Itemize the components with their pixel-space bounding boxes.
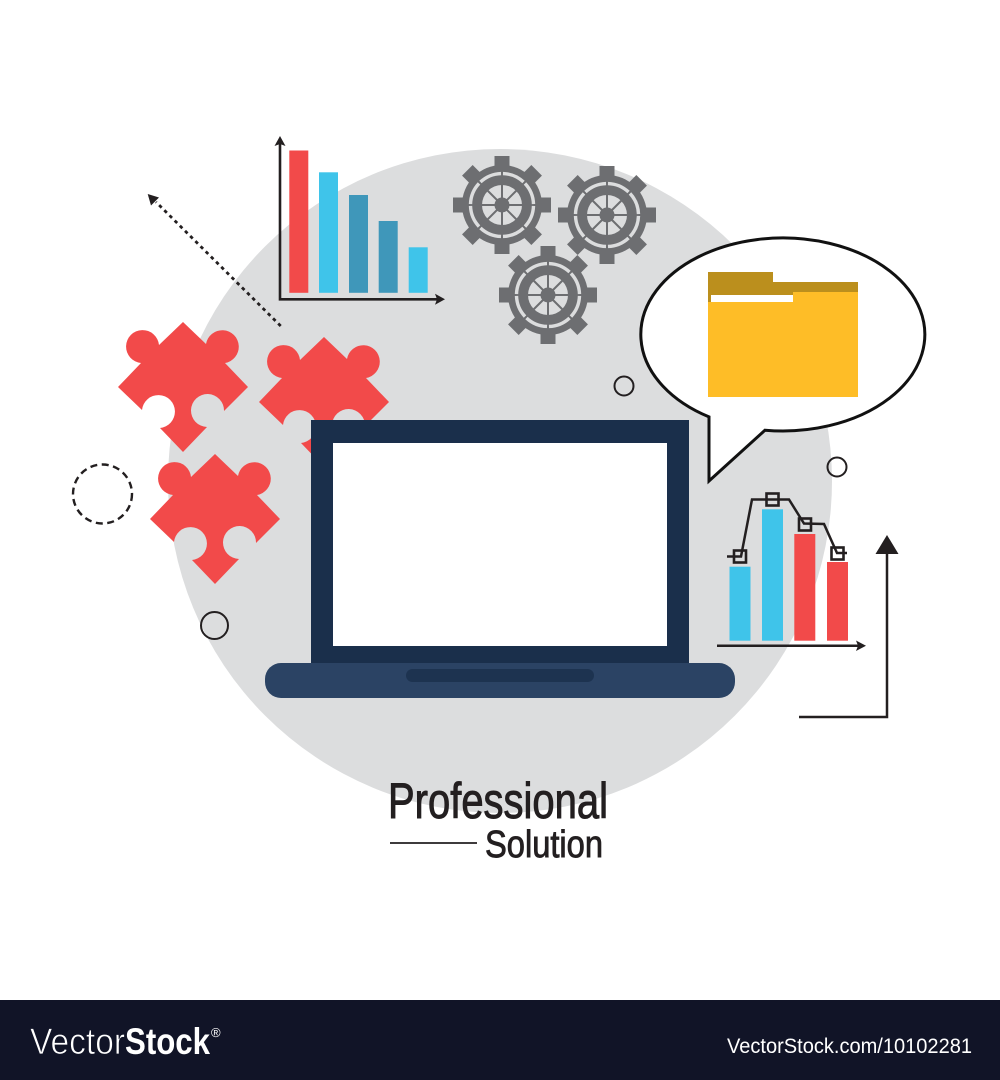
bar: teal (349, 195, 368, 293)
trend markers (734, 494, 844, 562)
dotted arrow (148, 194, 281, 326)
bar chart: line overlay (717, 494, 866, 651)
laptop screen frame (311, 420, 689, 663)
puzzle piece: top right (259, 337, 389, 467)
speech bubble (641, 238, 925, 481)
subtitle rule (390, 842, 477, 844)
bar: light blue short (409, 247, 428, 293)
bar: red (289, 150, 308, 293)
background grey circle (168, 149, 832, 813)
title: Solution: Solution (485, 824, 603, 866)
trend line (727, 500, 847, 556)
title: Professional: Professional (388, 773, 608, 829)
footer logo: Vector (30, 1021, 125, 1062)
footer bar (0, 1000, 1000, 1080)
footer logo: ® (211, 1025, 221, 1040)
x axis arrow (717, 640, 866, 651)
puzzle pieces (118, 322, 389, 584)
bar: light blue (319, 172, 338, 293)
puzzle piece: top left (118, 322, 248, 452)
chart axes (274, 136, 445, 305)
bars (730, 509, 848, 641)
puzzle piece: bottom (150, 454, 280, 584)
laptop (265, 420, 735, 698)
footer logo (30, 1021, 221, 1062)
icon: folder (708, 272, 858, 397)
footer logo: Stock (125, 1021, 210, 1062)
laptop screen (333, 443, 667, 646)
bar chart: descending bars (274, 136, 445, 305)
gears (453, 156, 656, 344)
upward L arrow (799, 535, 898, 717)
bar: teal short (379, 221, 398, 293)
decorative dashed circle (73, 464, 132, 524)
laptop base (265, 663, 735, 698)
gear: right (558, 166, 656, 264)
small outlined circle: centre (614, 376, 634, 396)
gear: bottom (499, 246, 597, 344)
small outlined circle: right (828, 458, 846, 476)
small outlined circle: bottom left (201, 612, 228, 639)
gear: left (453, 156, 551, 254)
footer image id: VectorStock.com/10102281 (727, 1035, 972, 1058)
laptop touchpad (406, 669, 594, 682)
